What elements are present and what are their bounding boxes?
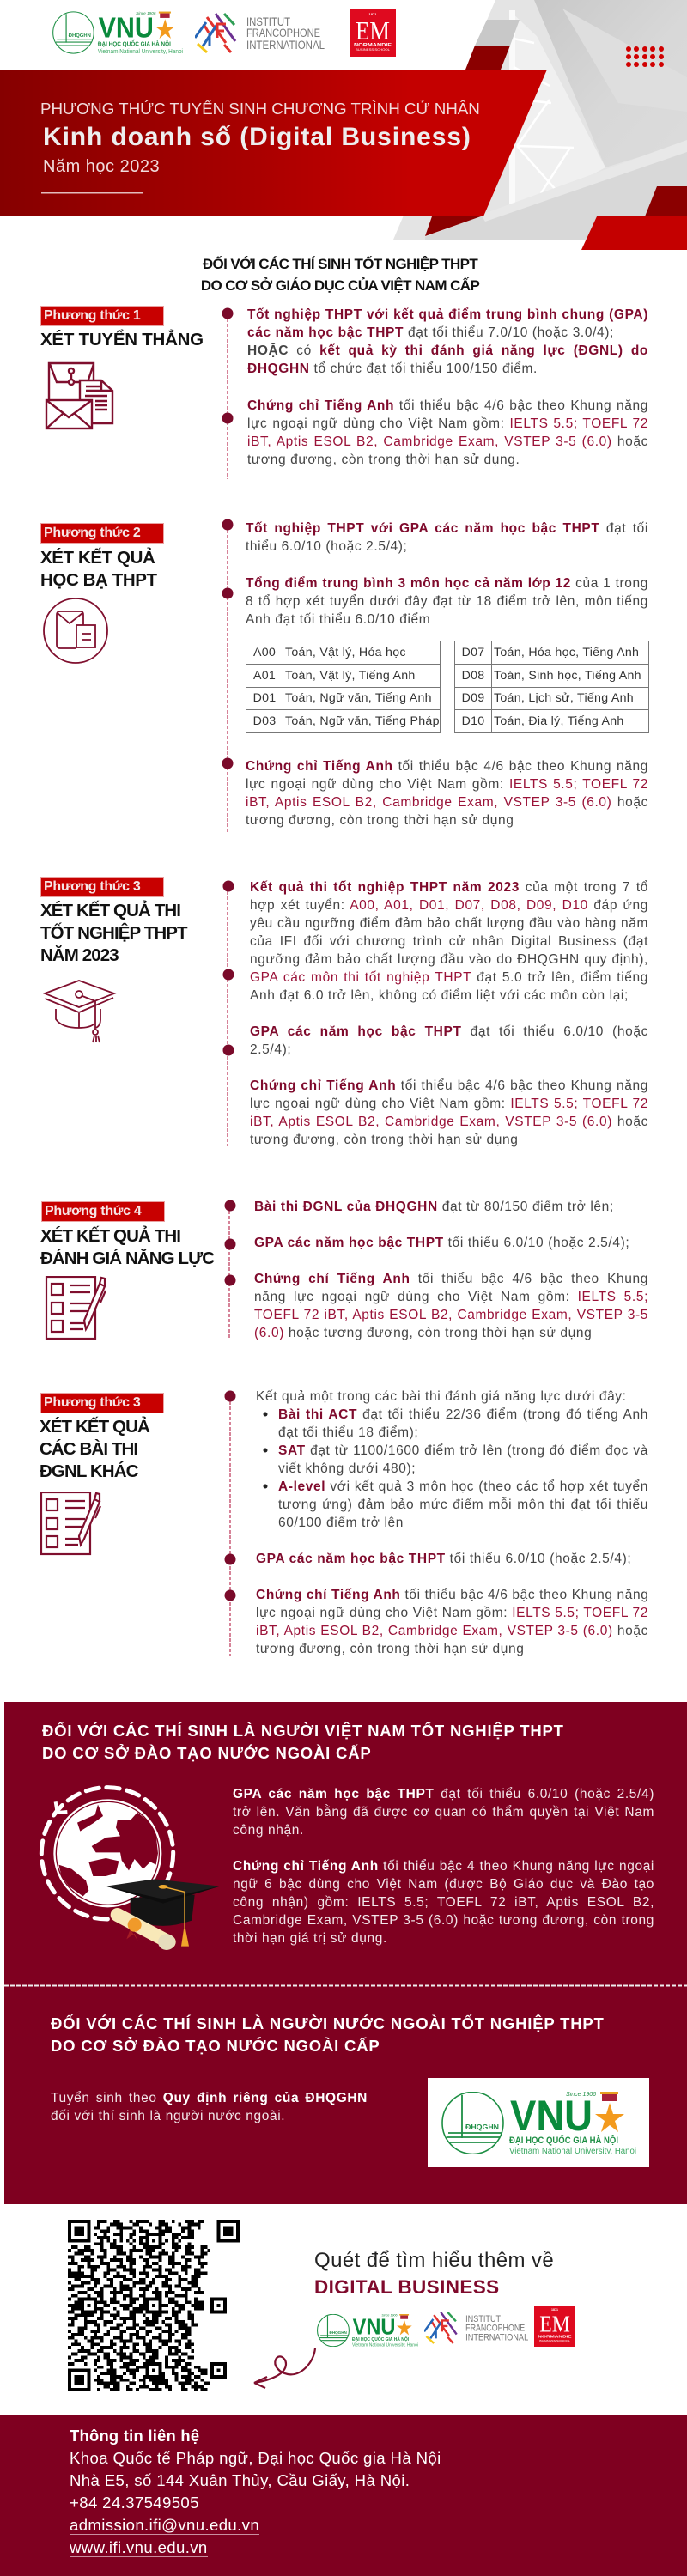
criterion: English certificate bbox=[247, 398, 648, 467]
method heading: HỌC BẠ THPT bbox=[40, 570, 157, 590]
criterion: GPA bbox=[246, 520, 648, 554]
criterion: English certificate: tương đương, còn trong thời hạn sử dụng bbox=[246, 813, 514, 828]
panel: method 4 bbox=[40, 1199, 648, 1340]
partner logos row bbox=[317, 2306, 575, 2347]
table: subject groups right: D09 bbox=[462, 691, 484, 705]
text: GPA requirement: công nhận. bbox=[233, 1823, 304, 1838]
criterion: English certificate: Chứng chỉ Tiếng Anh tối thiểu bậc 4/6 bậc theo Khung năng bbox=[247, 398, 648, 412]
panel: method 5 bbox=[40, 1389, 649, 1656]
criterion: English certificate bbox=[246, 759, 648, 828]
contact website: www.ifi.vnu.edu.vn bbox=[70, 2538, 208, 2556]
criterion: graduation exam result: Kết quả thi tốt nghiệp THPT năm 2023 của một trong 7 tổ bbox=[250, 879, 648, 895]
section heading: domestic graduates: ĐỐI VỚI CÁC THÍ SINH TỐT NGHIỆP THPT bbox=[203, 256, 477, 272]
scan prompt: Quét để tìm hiểu thêm về bbox=[314, 2249, 554, 2272]
contact email: admission.ifi@vnu.edu.vn bbox=[70, 2516, 259, 2534]
method heading bbox=[40, 548, 157, 590]
table: subject groups left: D01 bbox=[253, 691, 276, 705]
logo: EM small: BUSINESS SCHOOL bbox=[539, 2339, 570, 2342]
arrow: hand-drawn pointing to QR bbox=[249, 2344, 319, 2391]
criterion: other test intro: Kết quả một trong các bài thi đánh giá năng lực dưới đây: bbox=[256, 1389, 627, 1403]
list text: viết không dưới 480); bbox=[278, 1461, 416, 1476]
method heading bbox=[40, 1226, 215, 1268]
logo: EM Normandie: BUSINESS SCHOOL bbox=[356, 48, 390, 52]
criterion: English certificate: năng lực ngoại ngữ dùng cho Việt Nam gồm: IELTS 5.5; bbox=[254, 1290, 648, 1304]
criterion: graduation exam result: GPA các môn thi tốt nghiệp THPT đạt 5.0 trở lên, điểm tiếng bbox=[250, 970, 648, 985]
table: subject groups right: Toán, Hóa học, Tiếng Anh bbox=[494, 646, 639, 659]
criterion: graduation exam result: hợp xét tuyển: A00, A01, D01, D07, D08, D09, D10 đáp ứng bbox=[250, 898, 648, 913]
logo: VNU: Since 1906 bbox=[136, 11, 156, 15]
criterion: English certificate: Chứng chỉ Tiếng Anh tối thiểu bậc 4/6 bậc theo Khung năng bbox=[250, 1078, 648, 1092]
criterion: GPA or competency test bbox=[247, 307, 648, 376]
criterion: English certificate: Chứng chỉ Tiếng Anh tối thiểu bậc 4/6 bậc theo Khung bbox=[254, 1271, 648, 1286]
criterion: VNU competency test: Bài thi ĐGNL của ĐHQGHN đạt từ 80/150 điểm trở lên; bbox=[254, 1199, 614, 1214]
icon: graduation cap bbox=[43, 980, 117, 1042]
text: GPA requirement bbox=[233, 1784, 654, 1839]
table: subject groups left: A01 bbox=[253, 669, 276, 683]
hero photo and geometric shapes bbox=[0, 0, 687, 250]
table: subject groups left: Toán, Ngữ văn, Tiếng Pháp bbox=[285, 714, 440, 728]
criterion: grade 12 sum: Tổng điểm trung bình 3 môn học cả năm lớp 12 của 1 trong bbox=[246, 575, 648, 591]
badge: Phương thức 3 bbox=[44, 1395, 140, 1410]
logo: Institut Francophone International: INSTITUT bbox=[246, 15, 290, 28]
table: subject groups left: Toán, Vật lý, Tiếng Anh bbox=[285, 669, 416, 683]
criterion: grade 12 sum: Anh đạt tối thiểu 6.0/10 điểm bbox=[246, 612, 430, 627]
VNU mark: ĐHQGHN bbox=[465, 2123, 499, 2131]
criterion: GPA: 2.5/4); bbox=[250, 1042, 291, 1057]
method heading: XÉT KẾT QUẢ bbox=[40, 1417, 149, 1437]
call to action text bbox=[314, 2248, 572, 2301]
logo: Institut Francophone International bbox=[195, 13, 325, 53]
criterion: English certificate: iBT, Aptis ESOL B2, Cambridge Exam, VSTEP 3-5 (6.0) hoặc bbox=[247, 434, 648, 449]
academic year: Năm học 2023 bbox=[43, 157, 160, 176]
method heading bbox=[40, 900, 187, 965]
table: subject groups left: A00 bbox=[253, 646, 276, 659]
list text: Bài thi ACT đạt tối thiểu 22/36 điểm (trong đó tiếng Anh bbox=[278, 1406, 648, 1422]
logo: VNU: ĐẠI HỌC QUỐC GIA HÀ NỘI bbox=[98, 39, 171, 48]
badge: Phương thức 1 bbox=[44, 308, 140, 323]
text: English requirement: Chứng chỉ Tiếng Anh tối thiểu bậc 4 theo Khung năng lực ngoại bbox=[233, 1858, 654, 1874]
list text: đạt tối thiểu 18 điểm); bbox=[278, 1425, 418, 1440]
heading: foreign students: DO CƠ SỞ ĐÀO TẠO NƯỚC NGOÀI CẤP bbox=[51, 2037, 380, 2055]
table: subject groups left: Toán, Vật lý, Hóa học bbox=[285, 646, 406, 659]
VNU mark: ĐẠI HỌC QUỐC GIA HÀ NỘI bbox=[509, 2134, 618, 2146]
criterion: graduation exam result bbox=[250, 879, 648, 1003]
table: subject groups right: D07 bbox=[462, 646, 484, 659]
logo: EM Normandie bbox=[350, 9, 396, 57]
hero header bbox=[0, 0, 687, 250]
text: English requirement: công nhận) gồm: IELTS 5.5; TOEFL 72 iBT, Aptis ESOL B2, bbox=[233, 1895, 654, 1910]
criterion: graduation exam result: ngưỡng đảm bảo chất lượng đầu vào do ĐHQGHN quy định), bbox=[250, 952, 648, 967]
main title: Kinh doanh số (Digital Business) bbox=[43, 123, 471, 151]
criterion: GPA: thiểu 6.0/10 (hoặc 2.5/4); bbox=[246, 539, 407, 554]
panel: method 1 bbox=[40, 306, 648, 479]
list text: SAT đạt từ 1100/1600 điểm trở lên (trong đó điểm đọc và bbox=[278, 1443, 648, 1458]
text: English requirement: ngữ 6 bậc dùng cho Việt Nam (được Bộ Giáo dục và Đào tạo bbox=[233, 1877, 654, 1892]
VNU mark: VNU bbox=[510, 2092, 593, 2140]
criterion: English certificate: Chứng chỉ Tiếng Anh tối thiểu bậc 4/6 bậc theo Khung năng bbox=[246, 759, 648, 773]
logo: EM small: 1871 bbox=[551, 2308, 558, 2312]
method heading: NĂM 2023 bbox=[40, 945, 119, 965]
timeline bbox=[222, 519, 234, 832]
badge bbox=[40, 1393, 164, 1413]
criterion: English certificate bbox=[254, 1271, 648, 1340]
logo: VNU large bbox=[428, 2078, 649, 2167]
VNU mark: Since 1906 bbox=[566, 2092, 596, 2098]
method heading: XÉT KẾT QUẢ THI bbox=[40, 1226, 180, 1246]
method heading: TỐT NGHIỆP THPT bbox=[40, 923, 187, 943]
criterion: English certificate: TOEFL 72 iBT, Aptis ESOL B2, Cambridge Exam, VSTEP 3-5 bbox=[254, 1308, 648, 1322]
table: subject groups left bbox=[246, 641, 441, 733]
text: foreign student rule: Tuyển sinh theo Quy định riêng của ĐHQGHN bbox=[51, 2090, 368, 2105]
logo: VNU: VNU bbox=[99, 13, 154, 45]
badge: Phương thức 2 bbox=[44, 526, 140, 540]
heading: Vietnamese with foreign diploma: DO CƠ SỞ ĐÀO TẠO NƯỚC NGOÀI CẤP bbox=[42, 1744, 371, 1762]
table: subject groups right: Toán, Địa lý, Tiếng Anh bbox=[494, 714, 624, 728]
panel: method 3 bbox=[40, 877, 648, 1147]
method heading: XÉT KẾT QUẢ THI bbox=[40, 901, 180, 920]
heading: foreign students: ĐỐI VỚI CÁC THÍ SINH LÀ NGƯỜI NƯỚC NGOÀI TỐT NGHIỆP THPT bbox=[51, 2014, 605, 2032]
criterion: grade 12 sum bbox=[246, 575, 648, 627]
icon: circled document bbox=[43, 598, 108, 664]
criterion: GPA or competency test: ĐHQGHN tổ chức đạt tối thiểu 100/150 điểm. bbox=[247, 361, 538, 376]
timeline bbox=[223, 881, 234, 1146]
illustration: globe, cap and diploma bbox=[34, 1777, 232, 1958]
badge bbox=[40, 306, 164, 326]
timeline bbox=[225, 1391, 235, 1656]
logo: EM Normandie: EM bbox=[356, 15, 390, 46]
badge: Phương thức 4 bbox=[45, 1204, 141, 1218]
footer: contact info bbox=[0, 2415, 687, 2576]
logo: EM small: NORMANDIE bbox=[538, 2335, 572, 2340]
list text: A-level với kết quả 3 môn học (theo các tổ hợp xét tuyển bbox=[278, 1479, 648, 1494]
criterion: GPA: Tốt nghiệp THPT với GPA các năm học bậc THPT đạt tối bbox=[246, 520, 648, 536]
icon: checklist bbox=[45, 1276, 106, 1340]
criterion: GPA or competency test: HOẶC có kết quả kỳ thi đánh giá năng lực (ĐGNL) do bbox=[247, 343, 648, 358]
criterion: grade 12 sum: 8 tổ hợp xét tuyển dưới đây đạt từ 18 điểm trở lên, môn tiếng bbox=[246, 594, 648, 609]
badge: Phương thức 3 bbox=[44, 879, 140, 894]
criterion: GPA: GPA các năm học bậc THPT tối thiểu 6.0/10 (hoặc 2.5/4); bbox=[256, 1551, 631, 1566]
criterion: graduation exam result: Anh đạt 6.0 trở lên, không có điểm liệt với các môn còn lại; bbox=[250, 988, 629, 1003]
text: English requirement: Cambridge Exam, VSTEP 3-5 (6.0) hoặc tương đương, còn trong bbox=[233, 1913, 654, 1928]
logo: IFI small: INSTITUT bbox=[465, 2314, 501, 2324]
section heading: domestic graduates bbox=[201, 256, 479, 294]
badge bbox=[40, 877, 164, 897]
icon: checklist bbox=[40, 1492, 101, 1556]
text: foreign student rule: đối với thí sinh là người nước ngoài. bbox=[51, 2109, 285, 2123]
list text: 60/100 điểm trở lên bbox=[278, 1516, 404, 1530]
logo: VNU small bbox=[317, 2314, 418, 2347]
criterion: English certificate: lực ngoại ngữ dùng cho Việt Nam gồm: IELTS 5.5; TOEFL 72 bbox=[247, 416, 648, 431]
text: GPA requirement: GPA các năm học bậc THPT đạt tối thiểu 6.0/10 (hoặc 2.5/4) bbox=[233, 1786, 654, 1801]
bullet marks bbox=[262, 1405, 271, 1508]
timeline bbox=[222, 307, 234, 479]
criterion: GPA or competency test: Tốt nghiệp THPT với kết quả điểm trung bình chung (GPA) bbox=[247, 307, 648, 321]
heading: Vietnamese with foreign diploma bbox=[42, 1720, 564, 1765]
text: English requirement: thời hạn giá trị sử dụng. bbox=[233, 1931, 387, 1946]
criterion: graduation exam result: yêu cầu ngưỡng điểm đảm bảo chất lượng đầu vào hàng năm bbox=[250, 916, 648, 931]
icon: envelopes and document bbox=[45, 362, 113, 429]
badge bbox=[40, 523, 164, 544]
panel: foreign diploma sections bbox=[4, 1702, 687, 2204]
criterion: English certificate: Chứng chỉ Tiếng Anh tối thiểu bậc 4/6 bậc theo Khung năng bbox=[256, 1587, 649, 1602]
table: subject groups right: Toán, Lịch sử, Tiếng Anh bbox=[494, 691, 634, 705]
criterion: graduation exam result: của IFI đối với chương trình cử nhân Digital Business (đạt bbox=[250, 934, 648, 949]
criterion: English certificate: lực ngoại ngữ dùng cho Việt Nam gồm: IELTS 5.5; TOEFL 72 bbox=[250, 1097, 648, 1111]
list text: tương ứng) đảm bảo mức điểm mỗi môn thi đạt tối thiểu bbox=[278, 1498, 648, 1512]
hero overline: PHƯƠNG THỨC TUYỂN SINH CHƯƠNG TRÌNH CỬ NHÂN bbox=[40, 100, 480, 118]
logo: EM small: EM bbox=[539, 2312, 570, 2336]
logo: VNU small: ĐHQGHN bbox=[330, 2330, 347, 2335]
badge bbox=[41, 1201, 165, 1222]
criterion: English certificate: iBT, Aptis ESOL B2, Cambridge Exam, VSTEP 3-5 (6.0) hoặc bbox=[256, 1624, 648, 1638]
criterion: GPA: GPA các năm học bậc THPT tối thiểu 6.0/10 (hoặc 2.5/4); bbox=[254, 1235, 629, 1250]
method heading: XÉT KẾT QUẢ bbox=[40, 548, 155, 568]
criterion: English certificate: tương đương, còn trong thời hạn sử dụng. bbox=[247, 453, 520, 467]
criterion: GPA bbox=[250, 1024, 648, 1057]
panel: method 2 bbox=[40, 519, 649, 832]
logo: IFI small bbox=[424, 2311, 529, 2344]
contact address: Khoa Quốc tế Pháp ngữ, Đại học Quốc gia Hà Nội bbox=[70, 2449, 441, 2467]
logo: EM Normandie: NORMANDIE bbox=[354, 43, 392, 48]
table: subject groups right: D10 bbox=[462, 714, 484, 728]
criterion: English certificate: lực ngoại ngữ dùng cho Việt Nam gồm: IELTS 5.5; TOEFL 72 bbox=[256, 1606, 648, 1620]
criterion: English certificate bbox=[256, 1585, 648, 1658]
criterion: English certificate: tương đương, còn trong thời hạn sử dụng bbox=[256, 1642, 524, 1656]
criterion: English certificate: lực ngoại ngữ dùng cho Việt Nam gồm: IELTS 5.5; TOEFL 72 bbox=[246, 777, 648, 792]
table: subject groups right bbox=[454, 641, 649, 733]
contact heading: Thông tin liên hệ bbox=[70, 2427, 199, 2445]
criterion: English certificate: iBT, Aptis ESOL B2, Cambridge Exam, VSTEP 3-5 (6.0) hoặc bbox=[250, 1115, 648, 1129]
logo: VNU: ĐHQGHN bbox=[69, 33, 91, 39]
criterion: English certificate: tương đương, còn trong thời hạn sử dụng bbox=[250, 1133, 518, 1147]
method heading: ĐÁNH GIÁ NĂNG LỰC bbox=[40, 1249, 214, 1268]
method heading bbox=[40, 1417, 149, 1481]
criterion: GPA: GPA các năm học bậc THPT đạt tối thiểu 6.0/10 (hoặc bbox=[250, 1024, 648, 1039]
criterion: English certificate bbox=[250, 1078, 648, 1147]
criterion: English certificate: (6.0) hoặc tương đương, còn trong thời hạn sử dụng bbox=[254, 1326, 592, 1340]
logo: VNU small: VNU bbox=[353, 2314, 395, 2339]
table: subject groups right: Toán, Sinh học, Tiếng Anh bbox=[494, 669, 641, 683]
VNU mark bbox=[441, 2092, 636, 2154]
list: ACT SAT A-level bbox=[263, 1406, 648, 1530]
logo: VNU bbox=[52, 11, 183, 54]
criterion: GPA or competency test: các năm học bậc THPT đạt tối thiểu 7.0/10 (hoặc 3.0/4); bbox=[247, 325, 614, 340]
table: subject groups left: Toán, Ngữ văn, Tiếng Anh bbox=[285, 691, 432, 705]
criterion: English certificate: iBT, Aptis ESOL B2, Cambridge Exam, VSTEP 3-5 (6.0) hoặc bbox=[246, 795, 648, 810]
text: foreign student rule bbox=[51, 2088, 368, 2125]
program name: DIGITAL BUSINESS bbox=[314, 2276, 500, 2298]
table: subject groups left: D03 bbox=[253, 714, 276, 728]
logo: VNU small: ĐẠI HỌC QUỐC GIA HÀ NỘI bbox=[352, 2336, 409, 2342]
table: subject groups right: D08 bbox=[462, 669, 484, 683]
contact phone: +84 24.37549505 bbox=[70, 2494, 199, 2512]
timeline bbox=[225, 1200, 235, 1338]
text: GPA requirement: trở lên. Văn bằng đã được cơ quan có thẩm quyền tại Việt Nam bbox=[233, 1805, 654, 1820]
QR code bbox=[68, 2220, 240, 2391]
logo: EM Normandie: 1871 bbox=[369, 12, 377, 16]
heading: Vietnamese with foreign diploma: ĐỐI VỚI CÁC THÍ SINH LÀ NGƯỜI VIỆT NAM TỐT NGHIỆP THPT bbox=[42, 1722, 564, 1740]
method heading: CÁC BÀI THI bbox=[40, 1439, 137, 1459]
logo: EM small bbox=[534, 2306, 575, 2347]
list text bbox=[278, 1405, 648, 1532]
text: English requirement bbox=[233, 1856, 654, 1947]
contact street: Nhà E5, số 144 Xuân Thủy, Cầu Giấy, Hà Nội. bbox=[70, 2471, 410, 2489]
heading: foreign students bbox=[51, 2013, 605, 2057]
method heading: ĐGNL KHÁC bbox=[40, 1461, 138, 1481]
method heading: XÉT TUYỂN THẲNG bbox=[40, 330, 204, 349]
section heading: domestic graduates: DO CƠ SỞ GIÁO DỤC CỦA VIỆT NAM CẤP bbox=[201, 277, 479, 294]
